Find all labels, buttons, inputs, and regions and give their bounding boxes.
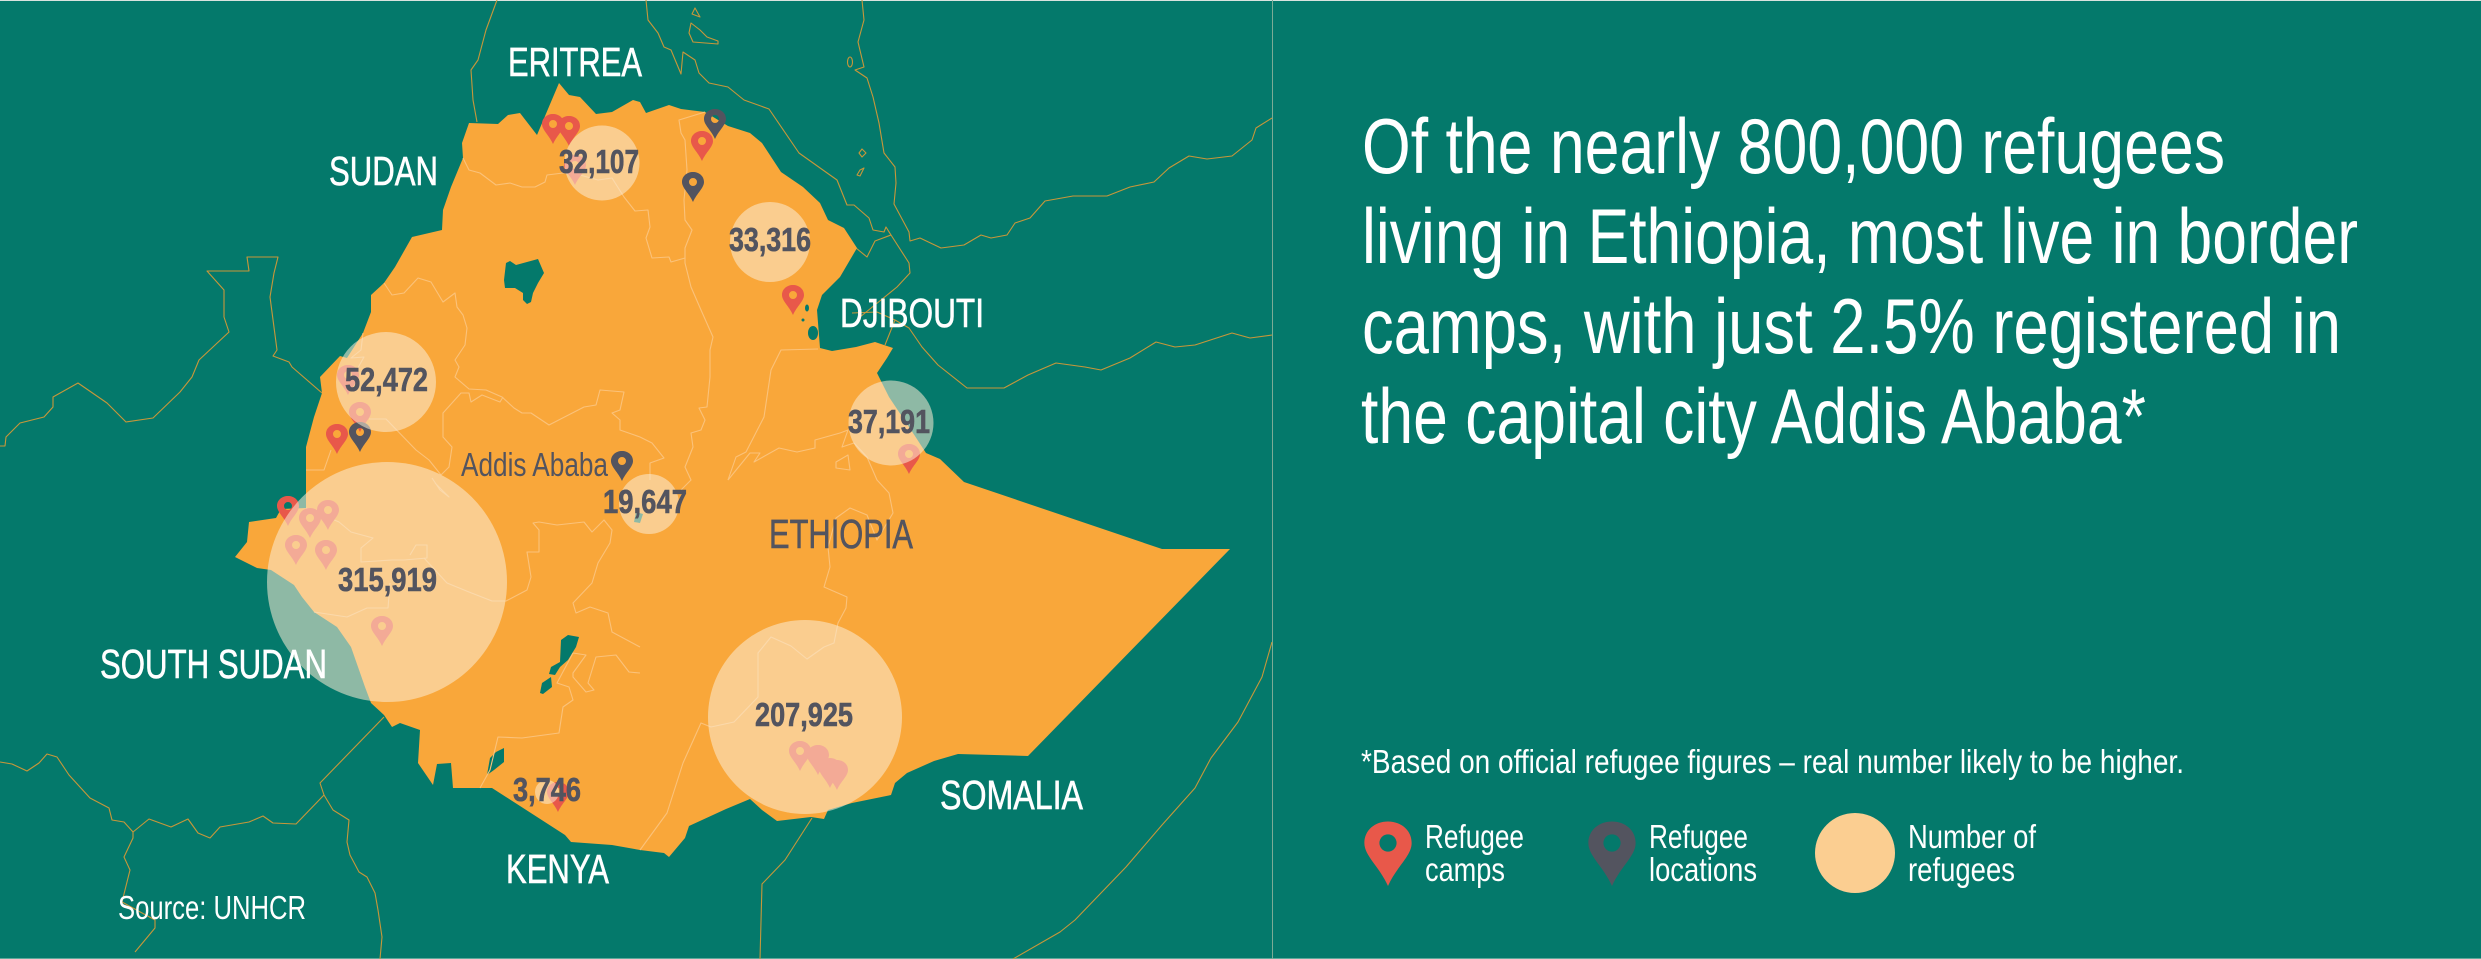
country labels: SOUTH SUDAN (100, 641, 327, 687)
lakes (487, 259, 818, 775)
country labels (100, 39, 1084, 892)
map of Ethiopia and neighbours (0, 0, 1272, 959)
headline: the capital city Addis Ababa* (1361, 372, 2146, 460)
city label: Addis Ababa: Addis Ababa (461, 446, 609, 483)
refugee counts: 19,647 (603, 483, 687, 520)
refugee counts: 32,107 (559, 143, 639, 180)
country labels: SOMALIA (940, 772, 1084, 818)
refugee location pins (349, 109, 726, 481)
source note: Source: UNHCR (118, 889, 306, 926)
legend: number of refugees (1815, 813, 2037, 893)
refugee counts: 52,472 (345, 361, 428, 398)
refugee counts (338, 143, 930, 808)
footnote: *Based on official refugee figures – real number likely to be higher. (1361, 743, 2184, 780)
refugee counts: 315,919 (338, 561, 437, 598)
country labels: ETHIOPIA (769, 511, 913, 557)
refugee counts: 37,191 (848, 403, 930, 440)
refugee counts: 33,316 (729, 221, 811, 258)
legend: refugee locations: locations (1649, 851, 1757, 888)
legend: refugee camps: Refugee (1425, 818, 1524, 855)
legend: refugee locations (1588, 818, 1757, 888)
internal region borders (306, 112, 893, 850)
headline: Of the nearly 800,000 refugees (1362, 102, 2225, 190)
country labels: SUDAN (329, 148, 438, 194)
refugee counts: 207,925 (755, 696, 853, 733)
neighbouring country borders (0, 0, 1272, 959)
legend: refugee camps: camps (1425, 851, 1505, 888)
legend: number of refugees: Number of (1908, 818, 2037, 855)
refugee counts: 3,746 (513, 771, 581, 808)
refugee camp pins (277, 114, 920, 812)
headline (1361, 102, 2358, 460)
Ethiopia country shape (235, 83, 1230, 857)
legend: refugee locations: Refugee (1649, 818, 1748, 855)
refugee number circles (267, 126, 934, 814)
country labels: KENYA (506, 846, 609, 892)
country labels: ERITREA (508, 39, 642, 85)
legend: refugee camps (1364, 818, 1524, 888)
country labels: DJIBOUTI (840, 290, 984, 336)
legend: number of refugees: refugees (1908, 851, 2015, 888)
legend (1364, 813, 2037, 893)
